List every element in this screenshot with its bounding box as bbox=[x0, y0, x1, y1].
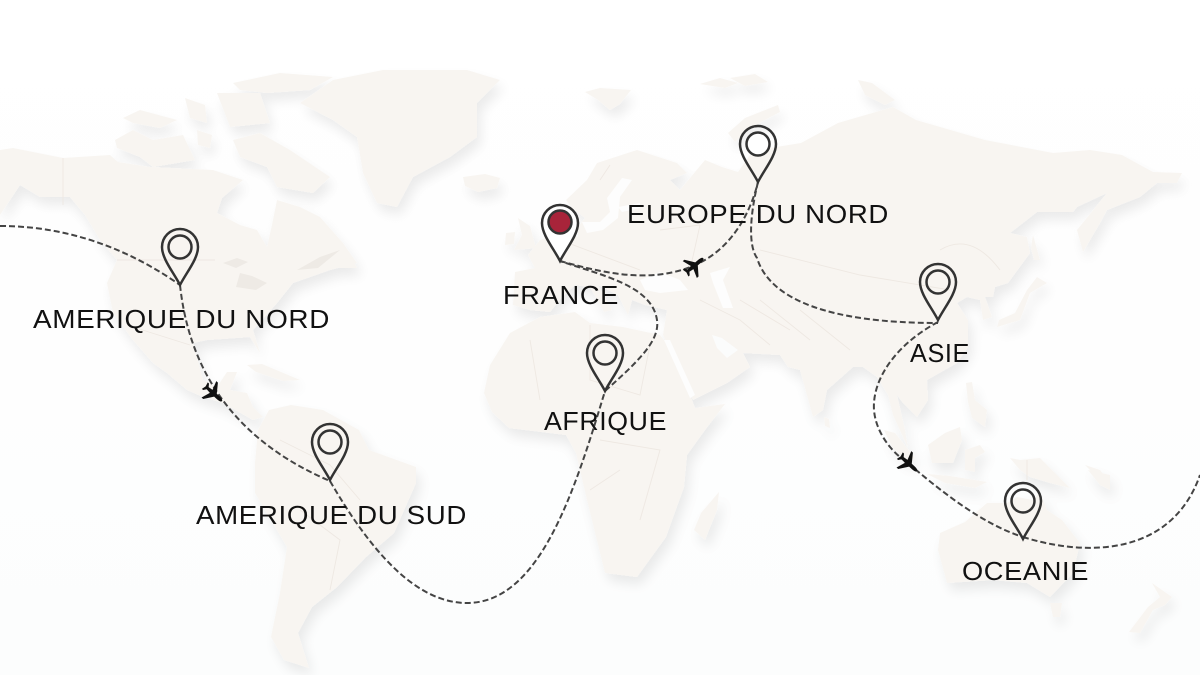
island: Sumatra bbox=[884, 430, 915, 462]
route: Afrique to France bbox=[560, 261, 657, 391]
islands: Arctic Canada bbox=[115, 73, 357, 268]
continent: Greenland bbox=[300, 70, 500, 207]
island: Tasmania bbox=[1050, 603, 1062, 617]
pin: Amerique du Nord bbox=[162, 229, 198, 285]
island: Sri Lanka bbox=[824, 417, 830, 428]
pin: Asie bbox=[920, 264, 956, 320]
pin: France (current location) bbox=[542, 205, 578, 261]
island: Ireland bbox=[505, 232, 515, 245]
island: Borneo bbox=[928, 427, 962, 463]
continent: North America bbox=[0, 148, 357, 420]
route: Europe du Nord to Asie bbox=[751, 182, 938, 323]
island: Java bbox=[927, 474, 987, 488]
pin: Europe du Nord bbox=[740, 126, 776, 182]
islands: Philippines bbox=[966, 382, 987, 427]
route: Oceanie onward bbox=[1023, 475, 1200, 548]
island: New Zealand bbox=[1129, 583, 1172, 633]
continent: Eurasia bbox=[513, 107, 1182, 448]
continent: South America bbox=[255, 405, 416, 668]
continent: Australia bbox=[938, 492, 1080, 597]
route: France to Europe du Nord bbox=[560, 182, 758, 275]
pin: Oceanie bbox=[1005, 483, 1041, 539]
island: Madagascar bbox=[694, 492, 719, 540]
icon: plane over Central America bbox=[197, 377, 229, 409]
route: Amerique du Nord to Amerique du Sud bbox=[180, 285, 330, 481]
icon: plane over Europe bbox=[679, 250, 710, 281]
label: Asie: ASIE bbox=[910, 340, 970, 368]
islands: Caribbean bbox=[247, 364, 300, 381]
islands: Svalbard bbox=[585, 88, 631, 110]
label: Amerique du Nord: AMERIQUE DU NORD bbox=[33, 306, 330, 334]
island: New Guinea bbox=[1010, 458, 1070, 488]
island: Japan bbox=[997, 277, 1047, 327]
label: Europe du Nord: EUROPE DU NORD bbox=[627, 201, 889, 229]
continent: Africa bbox=[484, 312, 725, 577]
islands: Novaya Zemlya bbox=[728, 105, 780, 142]
inland seas bbox=[582, 178, 738, 398]
label: France: FRANCE bbox=[503, 282, 619, 310]
route: Pacific to Amerique du Nord bbox=[0, 226, 180, 285]
label: Oceanie: OCEANIE bbox=[962, 558, 1089, 586]
route: Amerique du Sud to Afrique bbox=[330, 391, 605, 603]
flight route bbox=[0, 182, 1200, 603]
island: Iceland bbox=[463, 174, 500, 192]
icon: plane over Indonesia bbox=[892, 447, 924, 479]
islands: Melanesia bbox=[1085, 465, 1110, 490]
pin: Afrique bbox=[587, 335, 623, 391]
island: Sakhalin bbox=[1031, 235, 1040, 260]
route: Asie to Oceanie bbox=[874, 322, 1023, 537]
islands: Franz Josef bbox=[700, 74, 768, 88]
island: Great Britain bbox=[514, 218, 536, 250]
islands: Russian Arctic bbox=[858, 80, 895, 105]
pin: Amerique du Sud bbox=[312, 424, 348, 480]
great lakes bbox=[223, 250, 340, 290]
label: Amerique du Sud: AMERIQUE DU SUD bbox=[196, 502, 467, 530]
label: Afrique: AFRIQUE bbox=[544, 408, 667, 436]
country borders bbox=[63, 158, 1027, 590]
island: Sulawesi bbox=[965, 445, 985, 472]
